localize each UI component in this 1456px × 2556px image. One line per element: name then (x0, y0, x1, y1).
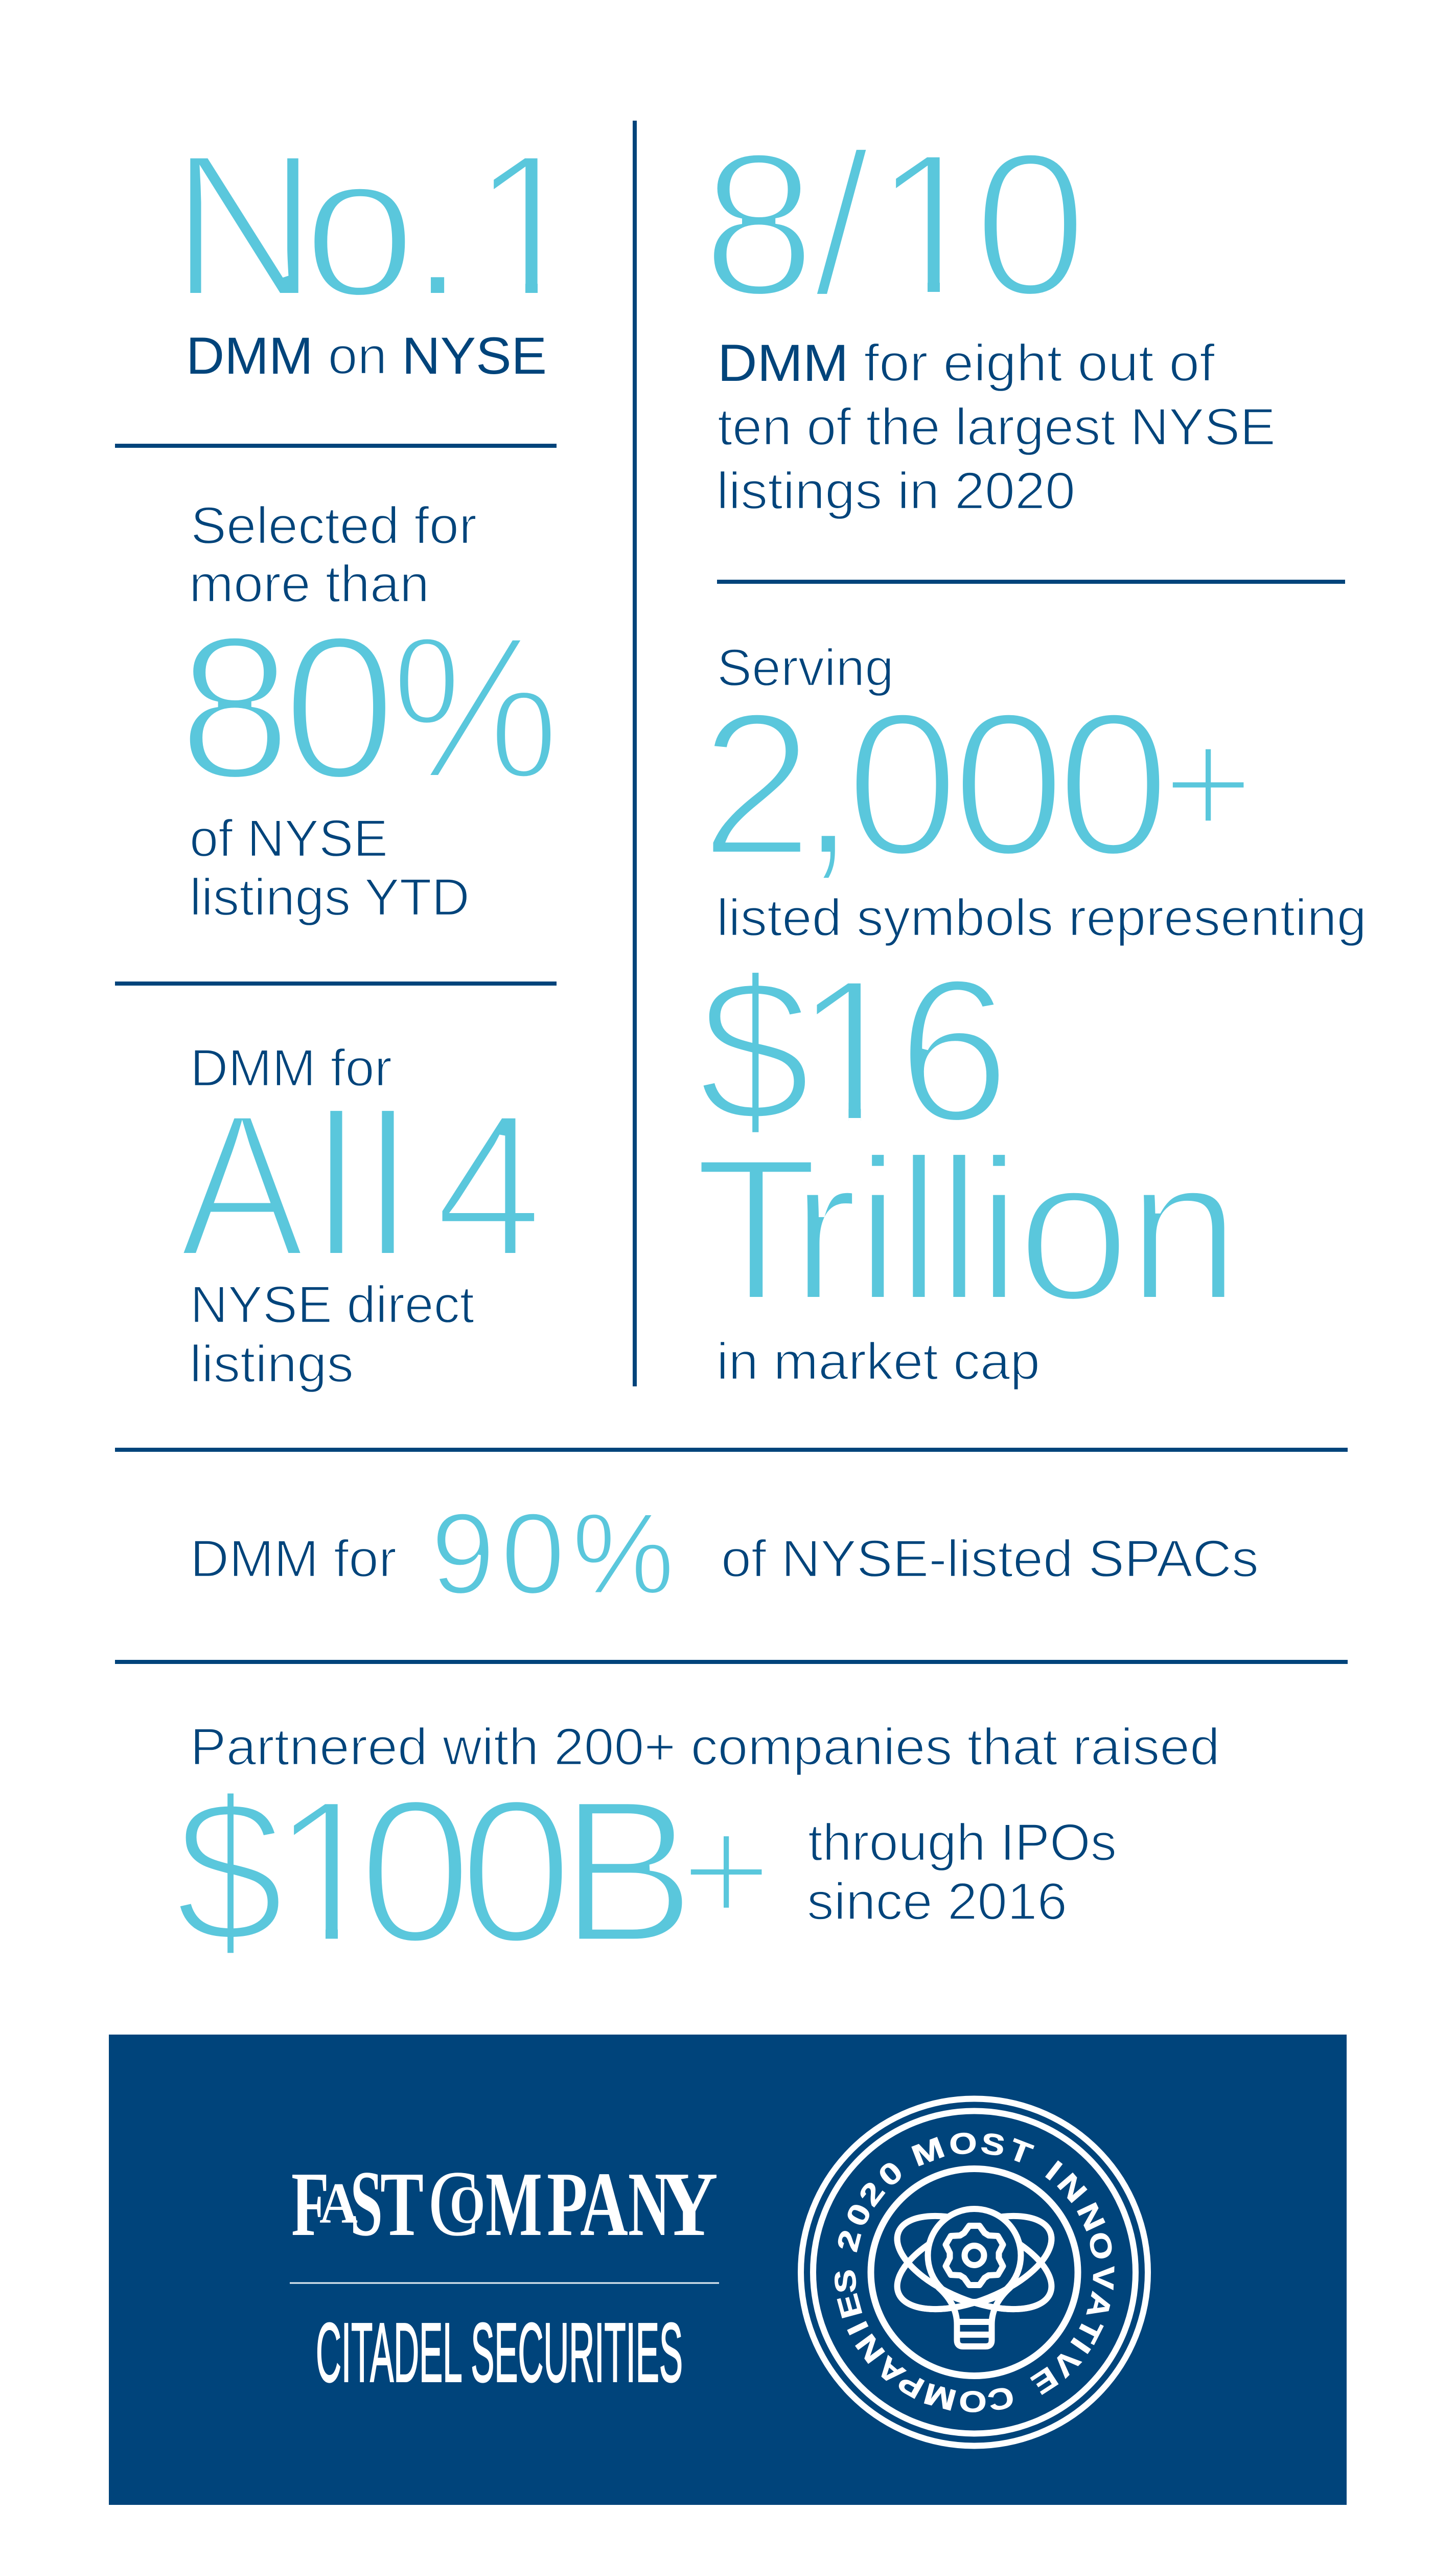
big number: $100B+ (180, 1793, 761, 1953)
vertical column divider (633, 121, 637, 1386)
trailing text: of NYSE-listed SPACs (721, 1530, 1259, 1588)
big number: No.1: No. (171, 111, 466, 339)
caption line 2: ten of the largest NYSE (718, 398, 1276, 456)
caption line 3: listings in 2020 (717, 462, 1075, 520)
caption: listed symbols representing (717, 888, 1367, 947)
big number: All 4: A (179, 1071, 306, 1299)
badge circular text: 0 (872, 2155, 909, 2193)
stat: $100B+ raised through IPOs (180, 1727, 1216, 1953)
logo: Fast Company: S (350, 2151, 383, 2255)
badge circular text: M (907, 2131, 949, 2173)
logo: Fast Company: A (580, 2153, 628, 2255)
big number: All 4: 4 (435, 1071, 543, 1299)
lead text: Partnered with 200+ companies that raised (190, 1718, 1220, 1776)
side text line 1: through IPOs (808, 1813, 1117, 1872)
badge circular text: S (979, 2126, 1007, 2162)
badge circular text: 2 (830, 2227, 867, 2255)
badge circular text: C (985, 2380, 1017, 2418)
caption line 1: NYSE direct (190, 1275, 474, 1334)
badge circular text: A (1080, 2289, 1119, 2322)
big number: 8/10: 8/ (702, 110, 871, 338)
badge circular text: I (1039, 2154, 1068, 2186)
logo: Fast Company (291, 2151, 718, 2255)
logo: Fast Company: T (380, 2153, 424, 2255)
badge circular text: A (870, 2349, 911, 2392)
badge circular text: O (1082, 2229, 1120, 2263)
badge circular text: P (893, 2365, 930, 2405)
stat: serving 2,000+ listed symbols (700, 638, 1367, 947)
lead text: DMM for (190, 1039, 392, 1097)
badge circular text: N (849, 2328, 891, 2369)
badge circular text: N (1071, 2198, 1112, 2236)
badge circular text: M (920, 2377, 960, 2417)
lead text: DMM for (190, 1530, 397, 1588)
big number: All 4 (179, 1071, 543, 1299)
logo: Fast Company: Y (659, 2153, 718, 2255)
badge circular text: 0 (839, 2198, 878, 2231)
panel: award banner (109, 2035, 1347, 2505)
badge circular text: I (1064, 2332, 1097, 2359)
badge circular text: N (1051, 2167, 1093, 2209)
badge circular text (828, 2126, 1121, 2418)
big number: No.1 (190, 158, 538, 295)
logo: Fast Company: P (547, 2153, 588, 2255)
big number: 8/10: 0 (974, 110, 1087, 338)
stat: more than 80% of NYSE listings YTD (178, 496, 560, 926)
logo: Fast Company: A (319, 2172, 358, 2235)
logo: Fast Company: O (450, 2175, 485, 2234)
logo: Fast Company: F (291, 2153, 329, 2255)
badge circular text: O (959, 2385, 987, 2418)
big number: $100B+: + (680, 1781, 773, 1958)
big number: 80%: 80 (178, 593, 396, 821)
badge: 2020 Most Innovative Companies (801, 2099, 1148, 2446)
big number: All 4: ll (313, 1071, 410, 1299)
big number: $16: $ (698, 936, 811, 1165)
stat: $16 Trillion in market cap (701, 972, 1224, 1389)
big number: $16: 1 (794, 936, 908, 1165)
lead text: Serving (717, 638, 894, 697)
stat row: DMM for 90% of NYSE-listed SPACs (190, 1489, 1259, 1618)
badge circular text: V (1046, 2343, 1087, 2383)
logo: Fast Company: C (428, 2151, 479, 2255)
stat: No.1 DMM on NYSE (190, 158, 545, 374)
badge circular text: E (1026, 2360, 1064, 2401)
panel: award banner: CITADEL SECURITIES (316, 2306, 683, 2400)
big number: 80%: % (390, 593, 560, 821)
stat: 8/10 largest NYSE listings (714, 150, 1273, 519)
big number: 2,000+: + (1162, 694, 1255, 871)
badge circular text: V (1087, 2265, 1121, 2290)
logo: Fast Company: M (486, 2153, 542, 2255)
big number: 8/10 (714, 150, 1076, 294)
logo: Fast Company: N (628, 2153, 670, 2255)
big number: $100B+: 00B (358, 1756, 696, 1986)
badge circular text: E (830, 2290, 869, 2322)
badge circular text: O (948, 2126, 978, 2161)
big number: No.1: 1 (471, 111, 585, 339)
big number: 8/10: 1 (873, 110, 987, 338)
badge circular text: T (1005, 2132, 1037, 2171)
big number: $100B+: $ (175, 1756, 285, 1986)
lead text: Selected for (191, 496, 477, 555)
caption line 1: of NYSE (190, 809, 388, 868)
caption line 2: listings (190, 1335, 354, 1393)
lead text line 2: more than (189, 555, 429, 613)
big number: 80% (178, 593, 560, 821)
badge circular text: I (841, 2316, 875, 2340)
big number: 90%: 90% (431, 1489, 675, 1618)
icon: lightbulb with gear and orbits (884, 2197, 1065, 2346)
big number: $100B+: 1 (271, 1756, 385, 1986)
caption line 1: DMM for eight out of (718, 334, 1215, 392)
big number: 2,000+: 2,000 (700, 670, 1170, 898)
badge circular text: S (828, 2268, 863, 2294)
caption: DMM on NYSE: DMM on NYSE (186, 327, 547, 385)
big number: $16: 6 (897, 936, 1010, 1165)
badge circular text: 2 (852, 2176, 891, 2212)
big number: $16 (703, 972, 999, 1132)
side text line 2: since 2016 (807, 1872, 1067, 1930)
big number: Trillion: Trillion (694, 1115, 1240, 1343)
caption: in market cap (717, 1332, 1040, 1390)
badge circular text: T (1070, 2314, 1110, 2348)
stat: DMM for All 4 NYSE direct listings (179, 1039, 543, 1393)
caption line 2: listings YTD (190, 868, 470, 926)
